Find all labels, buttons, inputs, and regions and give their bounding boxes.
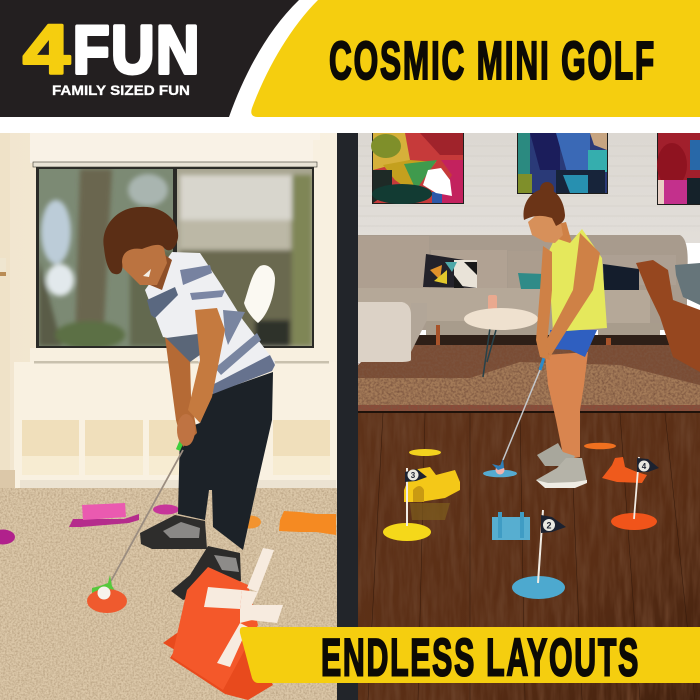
magenta disc at left edge — [0, 530, 15, 544]
orange cup with flag 4 — [611, 457, 659, 530]
windmill base — [163, 632, 273, 700]
cubby shelves — [22, 420, 330, 475]
boy: curly hair — [103, 207, 178, 274]
orange cup with flag 4: 4 — [642, 462, 647, 471]
pink golf ball — [496, 466, 504, 474]
sofa seat — [358, 288, 548, 322]
teal cushion — [518, 273, 544, 289]
yellow tee disc — [409, 449, 441, 456]
windmill obstacle — [163, 548, 283, 700]
painting 3 — [657, 133, 700, 205]
painting 2 — [517, 133, 608, 194]
girl: grey sneaker front — [536, 458, 587, 487]
blue tee disc — [483, 470, 517, 477]
header: dark logo panel — [0, 0, 299, 117]
boy: left shoe — [140, 515, 207, 549]
girl: sneaker sole — [536, 480, 587, 488]
panel: girl putting on wood floor — [358, 133, 700, 700]
yellow cup with flag 3 — [383, 468, 431, 541]
flag 3 — [405, 469, 427, 482]
logo word FUN: FUN — [73, 12, 201, 88]
golf club green grip — [176, 440, 182, 451]
boy: face — [122, 244, 167, 285]
leather armchair — [636, 260, 700, 372]
girl: neck — [553, 222, 572, 245]
golf club shaft — [111, 450, 183, 581]
girl: face — [528, 212, 563, 243]
yellow cup with flag 3: 3 — [411, 471, 416, 480]
boy: left shoe panel — [163, 522, 200, 538]
patterned cushion — [423, 254, 477, 288]
sofa legs — [399, 325, 611, 382]
window blind rail — [33, 162, 317, 167]
candle — [488, 295, 497, 314]
yellow ramp obstacle — [404, 467, 460, 502]
navy cushion — [603, 264, 639, 290]
boy: neck — [150, 255, 172, 290]
sofa arm side — [411, 303, 427, 352]
windmill blades — [204, 548, 283, 667]
magenta tee disc — [153, 504, 179, 514]
blue cup with flag 2 — [512, 510, 566, 599]
flag 2 — [541, 515, 566, 533]
boy: hands on grip — [177, 414, 195, 446]
magenta bridge obstacle — [69, 503, 139, 527]
girl: arms — [536, 233, 600, 360]
persian rug — [358, 345, 700, 413]
blue cup with flag 2: 2 — [546, 520, 552, 530]
golf ball — [98, 586, 110, 600]
orange zigzag obstacle — [602, 457, 647, 483]
red tee disc — [87, 589, 127, 613]
boy: arm behind — [165, 337, 197, 447]
round coffee table — [464, 308, 538, 377]
logo tagline: FAMILY SIZED FUN — [52, 82, 190, 98]
orange zigzag obstacle — [279, 511, 336, 535]
header: yellow title panel — [251, 0, 700, 117]
putter head blue — [492, 458, 504, 470]
boy: smile — [143, 269, 151, 277]
orange tee disc right — [584, 443, 616, 449]
boy: right shoe — [171, 546, 241, 600]
boy: front arm — [188, 308, 225, 423]
putter head — [92, 575, 114, 593]
lens glare on window — [244, 265, 275, 323]
flag 4 — [637, 458, 659, 472]
girl: hair and bun — [524, 182, 565, 226]
girl: yellow tank top — [548, 229, 607, 332]
wall and built-in unit — [0, 133, 337, 493]
blue ramp obstacle — [492, 512, 530, 540]
lens glare on painting — [423, 168, 452, 196]
sofa base — [426, 321, 551, 335]
boy: striped shirt — [145, 252, 275, 394]
sofa armrest — [358, 302, 411, 362]
blanket on chair — [675, 263, 700, 305]
bottom banner — [239, 627, 700, 683]
yellow reflection on floor — [410, 503, 450, 520]
brick wall — [358, 133, 700, 243]
panel: boy putting on carpet — [0, 133, 337, 700]
wood floor — [358, 413, 700, 700]
dark shadow under sofa — [358, 335, 700, 349]
girl: blue shorts — [550, 330, 597, 357]
girl putter grip — [540, 345, 548, 370]
girl: grey sneaker back — [537, 443, 575, 466]
orange tee disc — [248, 516, 261, 528]
sofa — [358, 235, 688, 338]
girl: legs — [545, 352, 588, 460]
boy: right shoe panel — [214, 555, 239, 572]
divider between photos — [336, 133, 358, 700]
girl putter shaft — [503, 370, 540, 460]
windmill tower — [172, 567, 258, 690]
logo numeral 4: 4 — [23, 10, 70, 88]
window with garden view — [30, 162, 330, 364]
logo: 4FUN family sized fun — [23, 10, 201, 98]
boy: trousers — [178, 372, 273, 550]
painting 1 — [371, 133, 464, 204]
carpet — [0, 470, 337, 700]
